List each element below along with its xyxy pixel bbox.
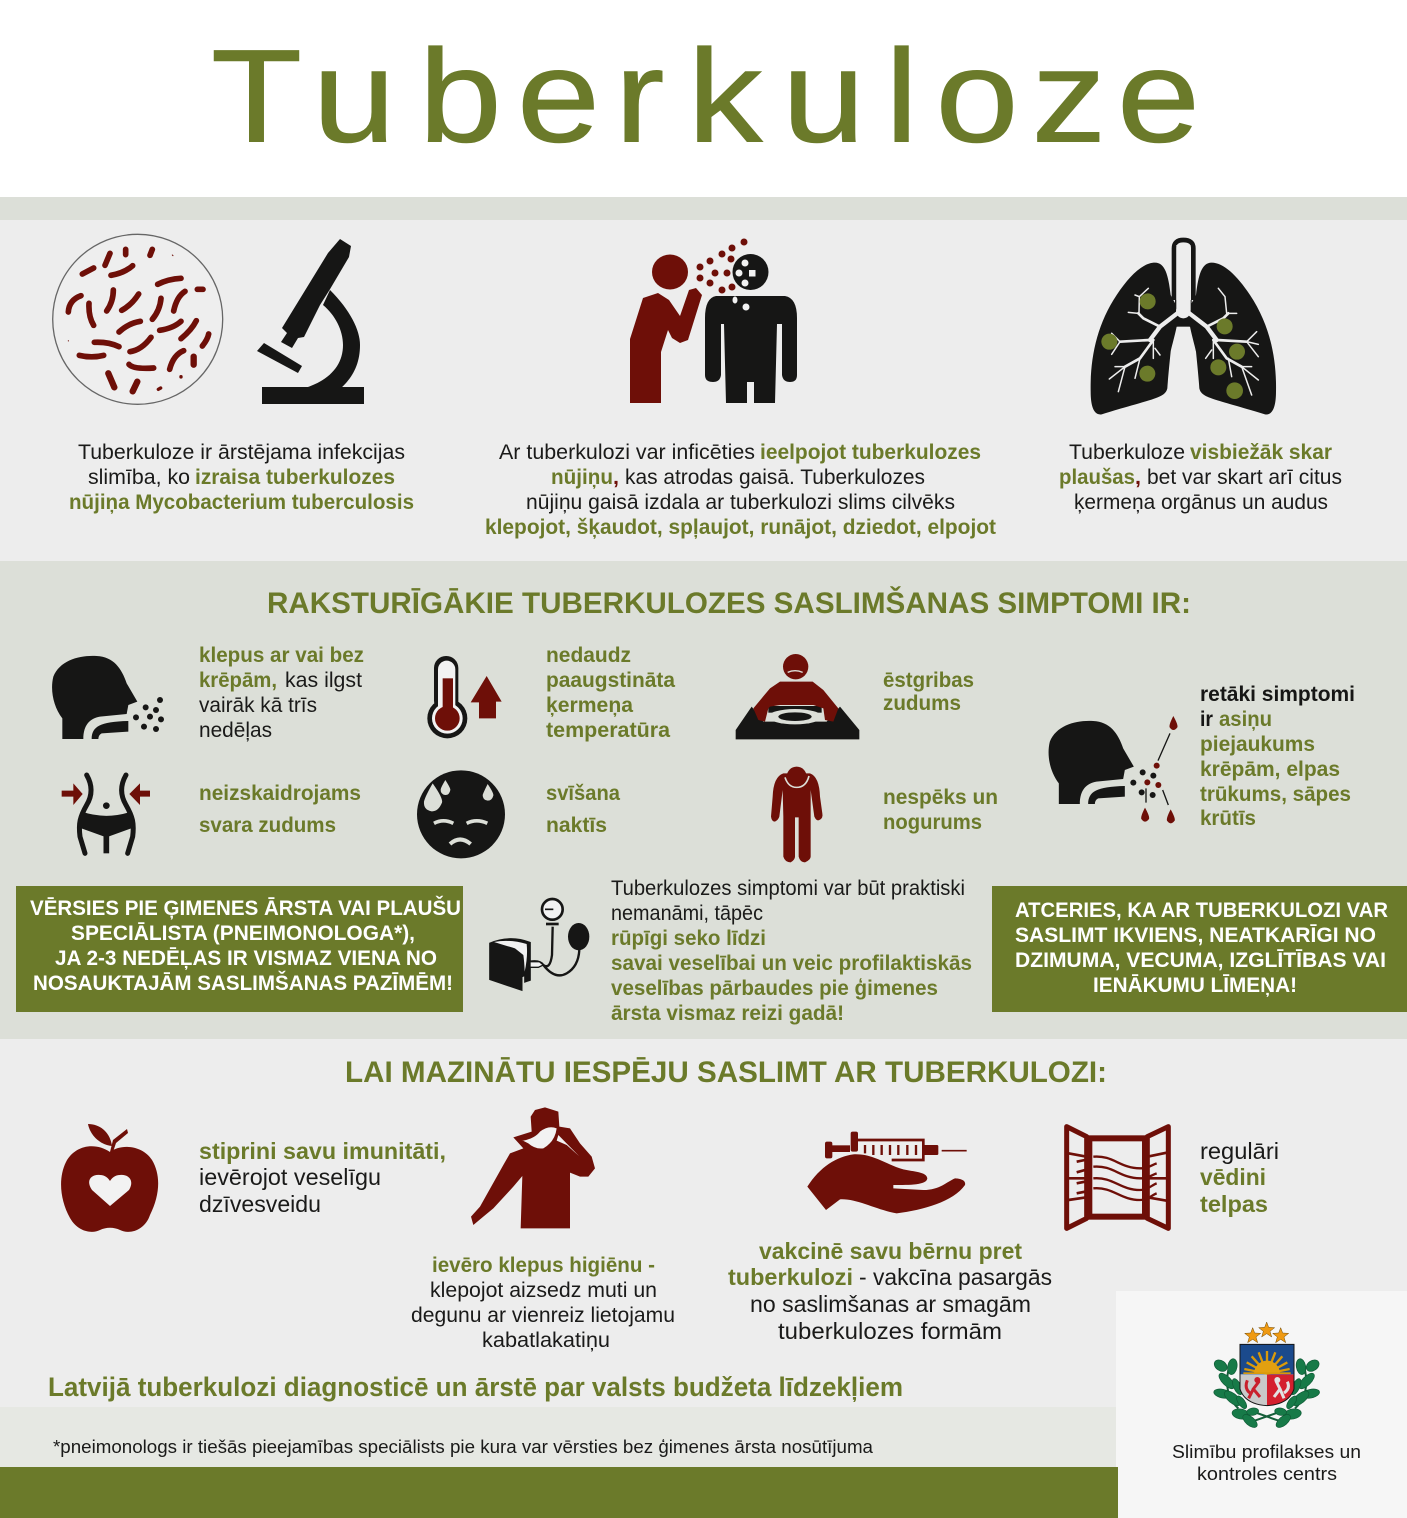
icon: open window with airflow xyxy=(1067,1127,1168,1228)
text: preventive check-ups: Tuberkulozes simptomi var būt praktiski xyxy=(611,876,965,900)
icon: tired standing person xyxy=(771,767,823,862)
text: weight loss xyxy=(199,781,361,837)
text: how it spreads: nūjiņu gaisā izdala ar tuberkulozi slims cilvēks xyxy=(526,490,955,514)
text: rarer symptoms xyxy=(1200,682,1355,830)
text: rarer symptoms: krēpām, elpas xyxy=(1200,757,1340,781)
text: rarer symptoms: krūtīs xyxy=(1200,806,1256,830)
text: what tuberculosis is: izraisa tuberkulozes xyxy=(195,465,395,489)
text: preventive check-ups: rūpīgi seko līdzi xyxy=(611,926,766,950)
text: vaccination: tuberkulozi xyxy=(728,1264,853,1290)
text: ventilate rooms: regulāri xyxy=(1200,1138,1279,1164)
text: how it spreads: Ar tuberkulozi var inficēties xyxy=(499,440,755,464)
text: ventilate rooms: telpas xyxy=(1200,1191,1268,1217)
text: cough: klepus ar vai bez xyxy=(199,643,364,667)
text: affected organs: bet var skart arī citus xyxy=(1147,465,1342,489)
text: cough hygiene: kabatlakatiņu xyxy=(482,1328,610,1352)
text: organisation name: Slimību profilakses un xyxy=(1172,1441,1361,1462)
title: Tuberkuloze xyxy=(211,22,1200,170)
text: fever xyxy=(546,643,676,742)
text: rarer symptoms: piejaukums xyxy=(1200,732,1315,756)
icon: person not eating at table xyxy=(736,654,859,739)
text: how it spreads: kas atrodas gaisā. Tuberkulozes xyxy=(625,465,925,489)
panel: symptoms xyxy=(0,561,1407,1039)
text: vaccination: vakcinē savu bērnu pret xyxy=(759,1238,1022,1264)
text: preventive check-ups xyxy=(611,876,972,1025)
text: how it spreads: klepojot, šķaudot, spļaujot, runājot, dziedot, elpojot xyxy=(485,515,996,539)
text: weight loss: neizskaidrojams xyxy=(199,781,361,805)
text: loss of appetite: ēstgribas xyxy=(883,668,974,692)
icon: blood pressure monitor xyxy=(490,899,589,990)
text: rarer symptoms: asiņu xyxy=(1219,707,1272,731)
text: cough: krēpām, xyxy=(199,668,277,692)
text: cough: vairāk kā trīs xyxy=(199,693,317,717)
text: cough hygiene xyxy=(411,1253,675,1352)
callout: see a doctor xyxy=(16,886,463,1012)
text: vaccination: tuberkulozes formām xyxy=(778,1318,1002,1344)
icon: bacteria in petri dish xyxy=(53,234,223,404)
text: what tuberculosis is: Tuberkuloze ir ārstējama infekcijas xyxy=(78,440,405,464)
text: strengthen immunity: stiprini savu imunitāti, xyxy=(199,1138,446,1164)
text: ventilate rooms: vēdini xyxy=(1200,1164,1266,1190)
text: footnote: *pneimonologs ir tiešās pieejamības speciālists pie kura var vērsties bez ģimenes ārsta nosūtījuma xyxy=(53,1437,874,1457)
icon: microscope xyxy=(257,239,364,404)
text: organisation name: kontroles centrs xyxy=(1197,1463,1337,1484)
callout: anyone can get sick xyxy=(992,886,1407,1012)
callout: see a doctor: SPECIĀLISTA (PNEIMONOLOGA*), xyxy=(71,921,415,945)
icon: hand with syringe xyxy=(807,1132,967,1213)
footer bar xyxy=(0,1467,1407,1518)
icon: person coughing into tissue xyxy=(471,1107,595,1228)
text: loss of appetite xyxy=(883,668,974,715)
text: cough: kas ilgst xyxy=(285,668,362,692)
text: affected organs: visbiežāk skar xyxy=(1190,440,1333,464)
callout: anyone can get sick: ATCERIES, KA AR TUBERKULOZI VAR xyxy=(1015,898,1388,922)
heading: prevention: LAI MAZINĀTU IESPĒJU SASLIMT AR TUBERKULOZI: xyxy=(345,1056,1107,1089)
text: rarer symptoms: retāki simptomi xyxy=(1200,682,1355,706)
text: fever: paaugstināta xyxy=(546,668,676,692)
text: organisation name xyxy=(1172,1441,1361,1484)
text: strengthen immunity: ievērojot veselīgu xyxy=(199,1164,381,1190)
text: rarer symptoms: ir xyxy=(1200,707,1214,731)
text: preventive check-ups: nemanāmi, tāpēc xyxy=(611,901,763,925)
callout: anyone can get sick: IENĀKUMU LĪMEŅA! xyxy=(1093,973,1297,997)
text: night sweats: naktīs xyxy=(546,813,607,837)
text: fever: ķermeņa xyxy=(546,693,634,717)
text: what tuberculosis is: nūjiņa Mycobacterium tuberculosis xyxy=(69,490,414,514)
text: weakness and fatigue: nespēks un xyxy=(883,785,998,809)
text: affected organs: plaušas xyxy=(1059,465,1135,489)
text: vaccination xyxy=(728,1238,1052,1344)
panel: prevention xyxy=(0,1039,1407,1407)
text: affected organs: ķermeņa orgānus un audus xyxy=(1074,490,1328,514)
panel: what is tuberculosis xyxy=(0,220,1407,561)
text: what tuberculosis is xyxy=(69,440,414,514)
text: loss of appetite: zudums xyxy=(883,691,961,715)
callout: see a doctor: VĒRSIES PIE ĢIMENES ĀRSTA VAI PLAUŠU xyxy=(30,895,461,920)
text: cough: nedēļas xyxy=(199,718,272,742)
icon: coughing head xyxy=(52,656,164,739)
text: weakness and fatigue xyxy=(883,785,998,834)
text: fever: nedaudz xyxy=(546,643,631,667)
text: what tuberculosis is: slimība, ko xyxy=(88,465,190,489)
text: preventive check-ups: ārsta vismaz reizi gadā! xyxy=(611,1001,844,1025)
text: strengthen immunity: dzīvesveidu xyxy=(199,1191,321,1217)
text: weight loss: svara zudums xyxy=(199,813,336,837)
callout: see a doctor: NOSAUKTAJĀM SASLIMŠANAS PAZĪMĒM! xyxy=(33,970,453,995)
text: night sweats: svīšana xyxy=(546,781,621,805)
text: how it spreads: , xyxy=(613,465,619,489)
panel: logo xyxy=(1116,1291,1407,1518)
text: how it spreads: nūjiņu xyxy=(551,465,613,489)
text: ventilate rooms xyxy=(1200,1138,1279,1217)
icon: blood droplets xyxy=(1130,716,1177,823)
text: weakness and fatigue: nogurums xyxy=(883,810,982,834)
text: free treatment statement: Latvijā tuberkulozi diagnosticē un ārstē par valsts budžeta līdzekļiem xyxy=(48,1372,903,1402)
text: strengthen immunity xyxy=(199,1138,446,1217)
text: cough hygiene: ievēro klepus higiēnu - xyxy=(432,1253,655,1277)
icon: Latvian coat of arms xyxy=(1212,1322,1321,1430)
text: affected organs xyxy=(1059,440,1342,514)
text: vaccination: - vakcīna pasargās xyxy=(859,1264,1052,1290)
text: affected organs: Tuberkuloze xyxy=(1069,440,1185,464)
text: cough hygiene: degunu ar vienreiz lietojamu xyxy=(411,1303,675,1327)
text: vaccination: no saslimšanas ar smagām xyxy=(750,1291,1031,1317)
text: affected organs: , xyxy=(1135,465,1141,489)
icon: lungs with infection spots xyxy=(1091,240,1276,414)
heading: symptoms: RAKSTURĪGĀKIE TUBERKULOZES SASLIMŠANAS SIMPTOMI IR: xyxy=(267,586,1191,620)
callout: see a doctor: JA 2-3 NEDĒĻAS IR VISMAZ VIENA NO xyxy=(55,946,437,970)
callout: anyone can get sick: DZIMUMA, VECUMA, IZGLĪTĪBAS VAI xyxy=(1015,948,1386,972)
text: how it spreads xyxy=(485,440,996,539)
callout: anyone can get sick: SASLIMT IKVIENS, NEATKARĪGI NO xyxy=(1015,923,1376,947)
panel: footnote xyxy=(0,1407,1407,1467)
icon: thermometer with arrow xyxy=(427,656,502,738)
icon: apple with heart xyxy=(61,1124,158,1232)
text: night sweats xyxy=(546,781,621,837)
text: preventive check-ups: savai veselībai un veic profilaktiskās xyxy=(611,951,972,975)
text: rarer symptoms: trūkums, sāpes xyxy=(1200,782,1351,806)
icon: coughing head with blood xyxy=(1049,721,1134,804)
icon: waist with arrows xyxy=(62,775,150,853)
text: cough xyxy=(199,643,364,742)
icon: sweating face xyxy=(417,770,505,858)
icon: person coughing on another person xyxy=(630,238,797,403)
text: preventive check-ups: veselības pārbaudes pie ģimenes xyxy=(611,976,938,1000)
text: fever: temperatūra xyxy=(546,718,671,742)
text: how it spreads: ieelpojot tuberkulozes xyxy=(760,440,981,464)
text: cough hygiene: klepojot aizsedz muti un xyxy=(430,1278,657,1302)
